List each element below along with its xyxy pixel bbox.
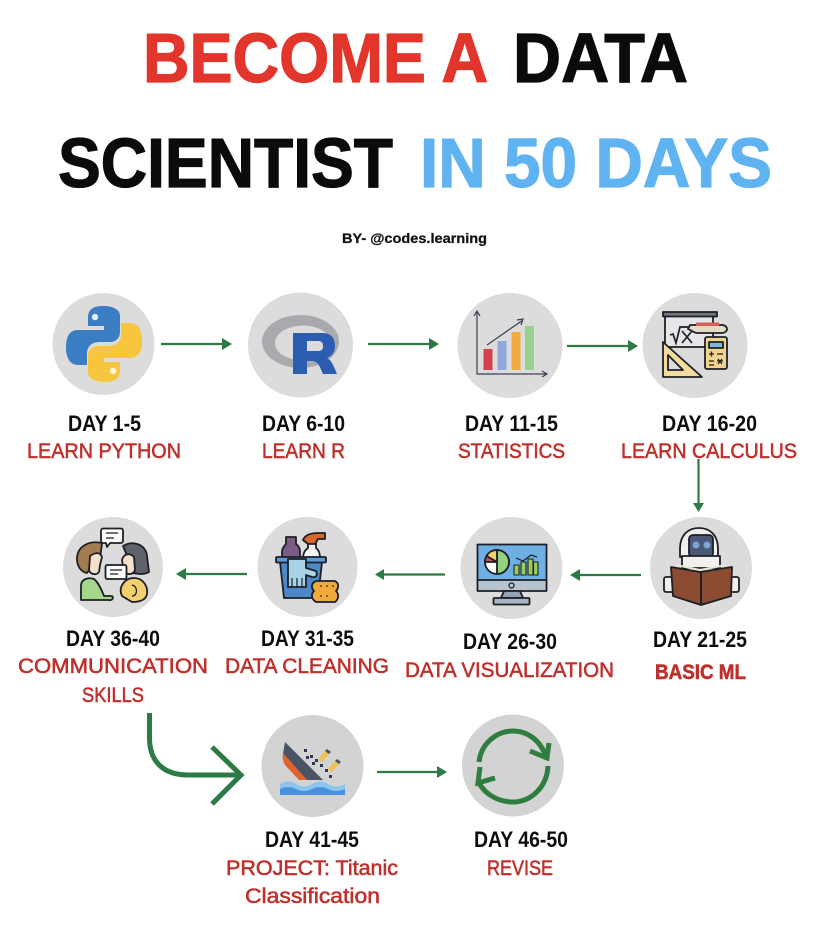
day label: DAY 1-5 (68, 411, 141, 436)
title: IN 50 DAYS (420, 124, 772, 202)
step: day 46-50 revise (462, 714, 568, 880)
topic: SKILLS (82, 684, 144, 707)
topic: DATA CLEANING (225, 655, 389, 678)
icon: python logo (52, 293, 154, 395)
day label: DAY 41-45 (265, 827, 359, 852)
step: day 11-15 statistics (458, 293, 565, 463)
arrow: curved connector (150, 713, 241, 804)
icon: revise cycle arrows (462, 714, 564, 816)
topic: STATISTICS (458, 440, 565, 463)
arrow (176, 568, 247, 580)
step: day 1-5 learn python (27, 293, 181, 463)
arrow (693, 459, 704, 512)
arrow (567, 340, 638, 352)
arrow (161, 338, 232, 350)
topic: LEARN CALCULUS (621, 440, 797, 463)
day label: DAY 16-20 (662, 411, 757, 436)
title: SCIENTIST (58, 124, 393, 202)
topic: LEARN R (262, 440, 345, 463)
step: day 41-45 project titanic classification (226, 715, 398, 908)
byline: BY- @codes.learning (342, 231, 487, 246)
step: day 6-10 learn r (248, 292, 353, 463)
icon: bar chart (458, 293, 562, 398)
step: day 16-20 learn calculus (621, 293, 797, 463)
topic (226, 857, 398, 908)
step: day 21-25 basic ml (650, 517, 752, 684)
icon: maths tools (642, 293, 748, 398)
topic: REVISE (487, 857, 553, 880)
day label: DAY 11-15 (465, 411, 558, 436)
step: day 26-30 data visualization (405, 517, 614, 682)
arrow (570, 569, 641, 581)
topic: LEARN PYTHON (27, 440, 181, 463)
icon: sinking ship (262, 715, 364, 817)
topic: COMMUNICATION (18, 655, 208, 678)
topic: PROJECT: Titanic (226, 857, 398, 880)
day label: DAY 26-30 (463, 629, 557, 654)
title: DATA (513, 19, 688, 97)
topic: Classification (245, 885, 380, 908)
icon: two people talking (63, 517, 163, 617)
arrow (377, 766, 447, 778)
arrow (368, 338, 439, 350)
step: day 36-40 communication skills (18, 517, 208, 707)
topic: BASIC ML (655, 661, 746, 684)
day label: DAY 31-35 (261, 626, 354, 651)
title (58, 19, 772, 202)
day label: DAY 36-40 (66, 626, 160, 651)
icon: cleaning bucket (258, 517, 358, 617)
arrow (375, 569, 445, 580)
day label: DAY 21-25 (653, 627, 747, 652)
day label: DAY 46-50 (474, 827, 568, 852)
topic: DATA VISUALIZATION (405, 659, 614, 682)
step: day 31-35 data cleaning (225, 517, 389, 678)
icon: monitor dashboard (460, 517, 562, 619)
icon: robot reading book (650, 517, 752, 619)
day label: DAY 6-10 (262, 411, 345, 436)
title: BECOME A (143, 19, 488, 97)
icon: r logo (248, 292, 353, 398)
topic (18, 655, 208, 707)
